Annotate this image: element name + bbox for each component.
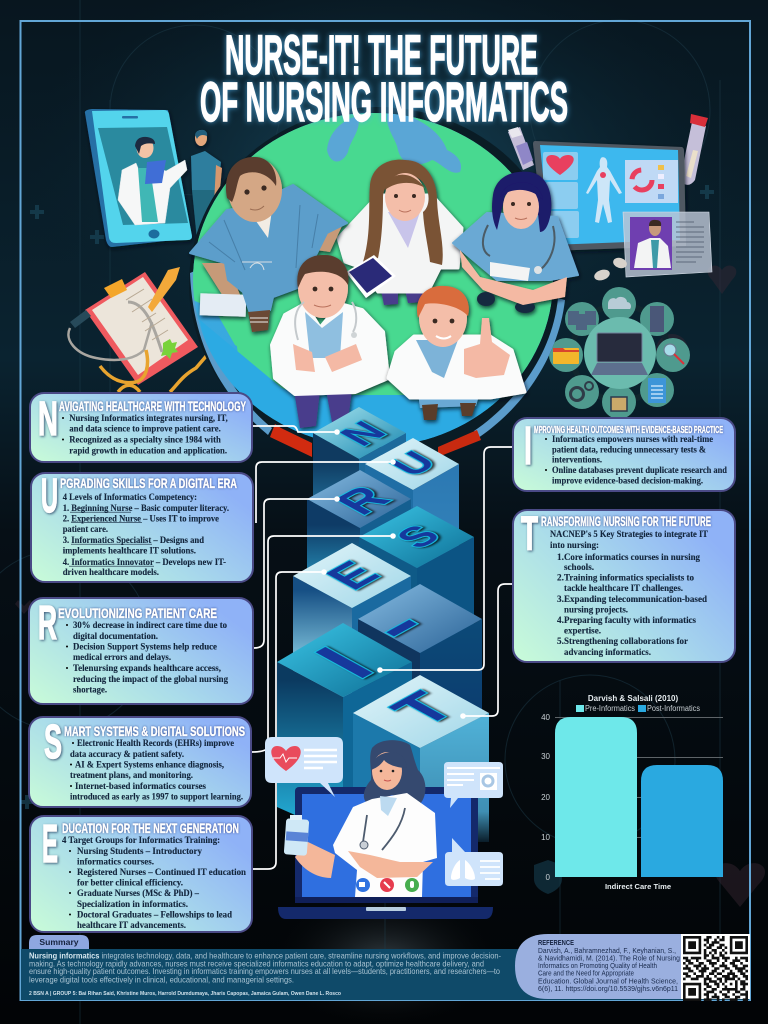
strategies: [550, 529, 708, 657]
axis labels: 10: [541, 833, 551, 842]
illustration: telehealth laptop with nurse: [265, 737, 503, 919]
bubble: heart: [265, 737, 343, 797]
strategies: schools.: [564, 562, 594, 572]
strategies: into nursing:: [550, 540, 599, 550]
legend: Post-Informatics: [647, 704, 700, 713]
strategies: tackle healthcare IT challenges.: [564, 583, 683, 593]
block: N: [313, 407, 406, 800]
bar chart: indirect care time: [541, 694, 723, 891]
x axis label: Indirect Care Time: [605, 882, 671, 891]
bar: post-informatics: [641, 765, 723, 877]
bubble: x-ray: [444, 762, 503, 808]
bullets: treatment plans, and monitoring.: [70, 770, 193, 780]
strategies: 2.: [557, 572, 564, 582]
strategies: Preparing faculty with informatics: [564, 615, 696, 625]
legend: [576, 704, 700, 713]
legend: Pre-Informatics: [585, 704, 635, 713]
reference panel: Darvish, A., Bahramnezhad, F., Keyhanian, S.,: [538, 946, 676, 955]
block: T: [353, 675, 489, 842]
block: R: R: [325, 480, 402, 522]
reference panel: & Navidhamidi, M. (2014). The Role of Nursing: [538, 954, 680, 962]
summary band: [21, 949, 749, 1000]
heading: DUCATION FOR THE NEXT GENERATION: [62, 820, 239, 836]
nurse: [284, 740, 437, 897]
bullets: Recognized as a specialty since 1984 with: [69, 434, 221, 444]
competency list: 3. Informatics Specialist – Designs and: [63, 535, 204, 545]
icon: standing nurse: [191, 130, 222, 241]
bullets: [66, 620, 228, 694]
bullets: medical errors and delays.: [73, 652, 171, 662]
panel: improving health outcomes: [513, 416, 735, 491]
axis labels: 30: [541, 752, 551, 761]
icon: smartphone with doctor and nurse: [85, 109, 222, 247]
bullets: Electronic Health Records (EHRs) improve: [77, 738, 234, 748]
summary tab: [29, 935, 89, 949]
character: male doctor with crossed arms: [272, 255, 388, 428]
axis labels: 40: [541, 713, 551, 722]
reference panel: REFERENCE: [538, 940, 574, 947]
bullets: data accuracy & patient safety.: [70, 749, 184, 759]
target groups: Doctoral Graduates – Fellowships to lead: [77, 910, 232, 920]
bullets: shortage.: [73, 684, 107, 694]
credits: 2 BSN A | GROUP 5: Bai Rihan Said, Khristine Muros, Harrold Dumdumaya, Jharis Capopas, Jamaica Gulam, Owen Dane L. Rosco: [29, 991, 341, 997]
block: U: [365, 438, 459, 800]
summary text: ensure high-quality patient outcomes. Investing in informatics training empowers nurses at all levels—students, practitioners, and researchers—to: [29, 966, 500, 976]
icon: test tube: [681, 114, 708, 185]
heading: AVIGATING HEALTHCARE WITH TECHNOLOGY: [59, 398, 246, 414]
target groups: informatics courses.: [77, 856, 154, 866]
bullets: improve evidence-based decision-making.: [552, 476, 703, 486]
icon: medical tablet dashboard: [533, 141, 686, 251]
bullets: introduced as early as 1997 to support learning.: [70, 792, 243, 802]
bullets: AI & Expert Systems enhance diagnosis,: [75, 760, 224, 770]
block: T: T: [377, 683, 470, 735]
strategies: Strengthening collaborations for: [564, 636, 688, 646]
competency list: patient care.: [63, 524, 108, 534]
block: U: U: [380, 445, 446, 482]
axis labels: 0: [546, 873, 551, 882]
competency list: [63, 492, 229, 577]
block: N: N: [330, 415, 396, 452]
target groups: healthcare IT advancements.: [77, 920, 186, 930]
strategies: 3.: [557, 594, 564, 604]
isometric NURSE-IT tower: [277, 407, 489, 842]
target groups: 4 Target Groups for Informatics Training:: [62, 835, 220, 845]
target groups: Specialization in informatics.: [77, 899, 188, 909]
panel: transforming nursing: [513, 508, 735, 662]
title: [200, 23, 568, 133]
QR code: [681, 934, 750, 1000]
axis labels: 20: [541, 793, 551, 802]
bullets: 30% decrease in indirect care time due to: [73, 620, 227, 630]
icon: globe with ring: [180, 107, 570, 461]
bullets: [70, 738, 243, 802]
target groups: Registered Nurses – Continued IT education: [77, 867, 246, 877]
strategies: Training informatics specialists to: [564, 572, 694, 582]
bullets: Nursing Informatics integrates nursing, IT,: [69, 413, 228, 423]
character: male nurse in blue scrubs: [190, 157, 347, 332]
bullets: Online databases prevent duplicate research and: [552, 465, 727, 475]
summary tab: Summary: [39, 937, 79, 947]
bar: pre-informatics: [555, 717, 637, 877]
block: E: E: [315, 555, 391, 597]
bullets: Internet-based informatics courses: [75, 781, 206, 791]
icon: health IT network: [549, 287, 690, 419]
panel: upgrading skills: U: [41, 470, 58, 523]
drop cap T: T: [521, 508, 538, 561]
bullets: [62, 413, 228, 456]
heading: EVOLUTIONIZING PATIENT CARE: [58, 605, 217, 621]
icon: clipboard and stethoscope: [68, 267, 208, 392]
summary text: leverage digital tools effectively in clinical, educational, and managerial settings.: [29, 974, 294, 984]
bullets: Informatics empowers nurses with real-time: [552, 434, 713, 444]
summary text: making. As technology rapidly advances, nurses must receive specialized informatics education to adapt, optimize healthcare delivery, and: [29, 958, 484, 968]
heading: PGRADING SKILLS FOR A DIGITAL ERA: [60, 475, 237, 491]
block: dash: -: [346, 597, 447, 653]
panel: revolutionizing patient care: [29, 597, 253, 704]
character: female nurse with navy hair: [453, 172, 578, 313]
doctor profile card: [623, 212, 712, 277]
drop cap R: R: [38, 597, 57, 650]
competency list: implements healthcare IT solutions.: [63, 546, 196, 556]
bullets: Decision Support Systems help reduce: [73, 642, 217, 652]
reference panel: Informatics on Promoting Quality of Health: [538, 961, 657, 970]
character: red-haired doctor with thumbs up: [388, 286, 525, 420]
chart title: Darvish & Salsali (2010): [588, 694, 678, 703]
block: S: S: [386, 519, 450, 554]
panel: upgrading skills: [31, 470, 253, 582]
strategies: 4.: [557, 615, 564, 625]
character: doctor with long brown hair: [338, 160, 462, 305]
bullets: digital documentation.: [73, 631, 158, 641]
summary text: [29, 950, 501, 984]
reference panel: [515, 934, 750, 999]
strategies: nursing projects.: [564, 604, 628, 614]
strategies: 1.: [557, 552, 564, 562]
block: S: [359, 506, 474, 800]
target groups: Graduate Nurses (MSc & PhD) –: [77, 888, 199, 898]
bullets: [545, 434, 727, 486]
panel: education: [30, 814, 252, 932]
connector lines: [250, 426, 513, 869]
call buttons: [356, 878, 419, 892]
competency list: 2. Experienced Nurse – Uses IT to improve: [63, 514, 219, 524]
strategies: expertise.: [564, 626, 601, 636]
reference panel: Care and the Need for Appropriate: [538, 968, 634, 978]
competency list: 4. Informatics Innovator – Develops new IT-: [63, 557, 226, 567]
block: E: [293, 543, 411, 810]
strategies: NACNEP's 5 Key Strategies to integrate IT: [550, 529, 708, 539]
block: R: [307, 470, 411, 800]
axis labels: [541, 713, 551, 882]
heading: MART SYSTEMS & DIGITAL SOLUTIONS: [64, 723, 245, 739]
reference panel: 6(6), 11. https://doi.org/10.5539/gjhs.v6n6p11: [538, 984, 678, 993]
bullets: and data science to improve patient care.: [69, 424, 221, 434]
block: dash: [346, 584, 482, 820]
drop cap N: N: [38, 393, 58, 446]
target groups: for better clinical efficiency.: [77, 878, 183, 888]
block: I: [277, 623, 412, 830]
target groups: Nursing Students – Introductory: [77, 846, 202, 856]
drop cap I: I: [524, 416, 532, 476]
strategies: 5.: [557, 636, 564, 646]
reference panel: Education. Global Journal of Health Science,: [538, 976, 678, 986]
bubble: lungs: [445, 838, 503, 886]
drop cap S: S: [44, 716, 62, 769]
strategies: Expanding telecommunication-based: [564, 594, 707, 604]
icon: medicine bottle: [508, 127, 534, 170]
bullets: reducing the impact of the global nursing: [73, 674, 228, 684]
summary text: Nursing informatics integrates technology, data, and healthcare to enhance patient care, streamline nursing workflows, and improve decision-: [29, 950, 501, 960]
competency list: driven healthcare models.: [63, 567, 159, 577]
icon: pills: [593, 256, 628, 282]
bullets: rapid growth in education and application.: [69, 446, 227, 456]
bullets: interventions.: [552, 454, 602, 464]
bullets: Telenursing expands healthcare access,: [73, 663, 221, 673]
panel: smart systems: [29, 716, 251, 807]
strategies: advancing informatics.: [564, 647, 651, 657]
competency list: 4 Levels of Informatics Competency:: [63, 492, 197, 502]
panel: education: E: [42, 814, 58, 874]
block: I: I: [298, 637, 392, 689]
competency list: 1. Beginning Nurse – Basic computer literacy.: [63, 503, 229, 513]
strategies: Core informatics courses in nursing: [564, 552, 700, 562]
panel: navigating healthcare: [30, 393, 252, 462]
bullets: patient data, reducing unnecessary tests &: [552, 444, 706, 454]
target groups: [62, 835, 246, 930]
